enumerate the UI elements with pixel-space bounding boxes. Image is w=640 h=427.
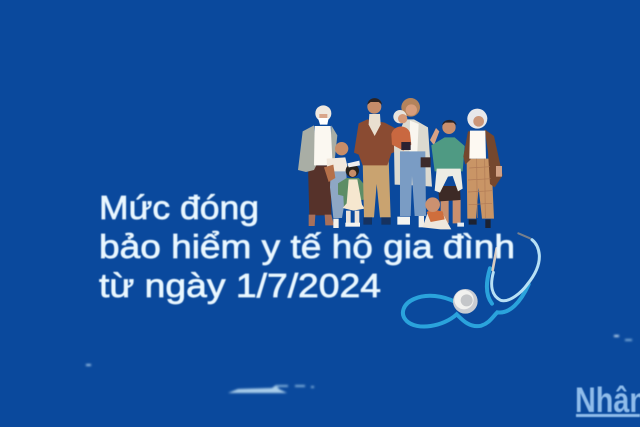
chest piece [453,289,478,314]
figure: grandmother [463,109,503,228]
illustration: stethoscope [403,233,539,327]
figure: girl in green jacket [338,161,366,227]
title line 2: bảo hiểm y tế hộ gia đình [99,228,515,265]
watermark: Nhân Dân logo [575,381,640,420]
figure: father [354,98,396,225]
figure: boy in green shirt [431,120,465,227]
illustration: family group [298,98,503,229]
title line 3: từ ngày 1/7/2024 [99,267,381,304]
figure: baby on the floor [423,197,451,229]
decorative light streak [86,335,632,393]
watermark underline [576,414,640,417]
figure: mother carrying baby [391,98,439,227]
stethoscope tube: blue [403,268,529,327]
stethoscope ear tubes: light [492,240,539,301]
figure: grandfather [298,105,337,226]
figure: child in jeans [324,142,349,228]
title [99,189,515,304]
title line 1: Mức đóng [99,189,259,226]
